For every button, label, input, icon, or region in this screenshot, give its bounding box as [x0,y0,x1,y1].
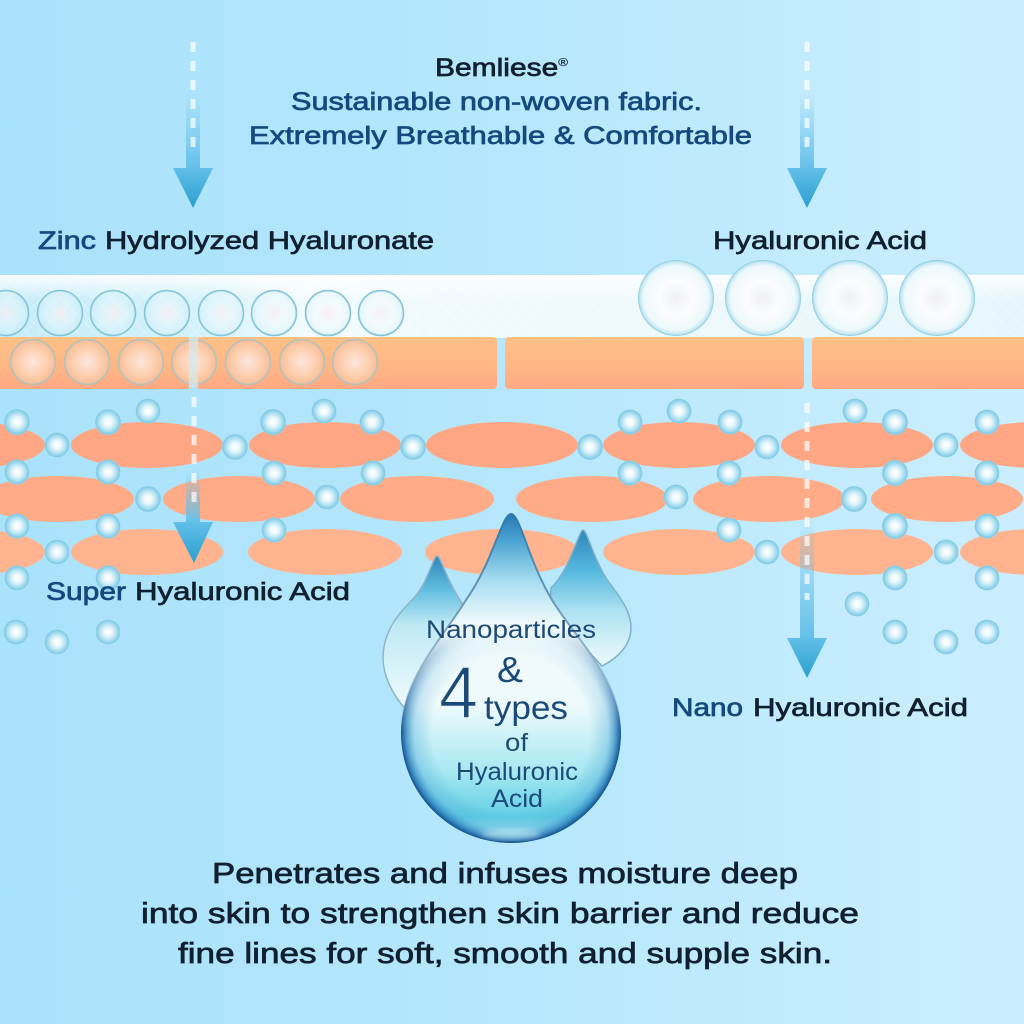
label: nano hyaluronic acid [672,694,968,722]
label: zinc hydrolyzed hyaluronate: Zinc [38,227,96,255]
panel: skin cells [0,422,1024,575]
zinc hydrolyzed hyaluronate molecules, lower row [10,340,378,384]
text: benefits summary: into skin to strengthen skin barrier and reduce [141,898,859,930]
text: drop label: 4 [439,651,478,734]
heading: fabric description: Sustainable non-woven fabric. [291,88,702,116]
panel: breathable fabric band [0,275,1024,338]
label: zinc hydrolyzed hyaluronate: Hydrolyzed Hyaluronate [105,227,434,255]
icon: right small drop [550,530,631,666]
heading: fabric description [249,88,752,150]
arrow: top right [787,42,827,208]
icon: left small drop [383,556,470,712]
small hyaluronic acid bubbles [4,398,1000,654]
text: drop label: Acid [491,785,543,813]
icon: water drops [383,514,631,850]
heading: fabric description: Extremely Breathable & Comfortable [249,122,752,150]
label: nano hyaluronic acid: Hyaluronic Acid [753,694,968,722]
arrow: super hyaluronic acid [173,337,213,563]
hyaluronic acid large molecules [638,260,975,336]
heading: Bemliese: ® [558,57,568,69]
label: zinc hydrolyzed hyaluronate [38,227,434,255]
text: benefits summary: Penetrates and infuses moisture deep [212,858,798,890]
text: drop label: Nanoparticles [426,616,596,644]
panel: orange skin surface bar [0,337,1024,390]
label: super hyaluronic acid [46,578,350,606]
arrow: top left [173,42,213,208]
text: drop label [426,616,596,813]
label: super hyaluronic acid: Super [46,578,126,606]
label: super hyaluronic acid: Hyaluronic Acid [135,578,350,606]
text: drop label: types [484,689,568,726]
arrow: nano hyaluronic acid [787,403,827,678]
label: nano hyaluronic acid: Nano [672,694,743,722]
heading: Bemliese: Bemliese [435,54,538,82]
row 2 cells [0,476,1023,522]
row 3 cells [0,529,1024,575]
label: hyaluronic acid: Hyaluronic Acid [713,227,927,255]
text: benefits summary: fine lines for soft, smooth and supple skin. [178,938,832,970]
icon: main drop [395,514,627,850]
text: benefits summary [141,858,859,970]
text: drop label: of [505,729,528,757]
text: drop label: & [497,649,523,690]
text: drop label: Hyaluronic [456,758,578,786]
zinc hydrolyzed hyaluronate molecules, upper row [0,290,404,336]
row 1 cells [0,422,1024,468]
